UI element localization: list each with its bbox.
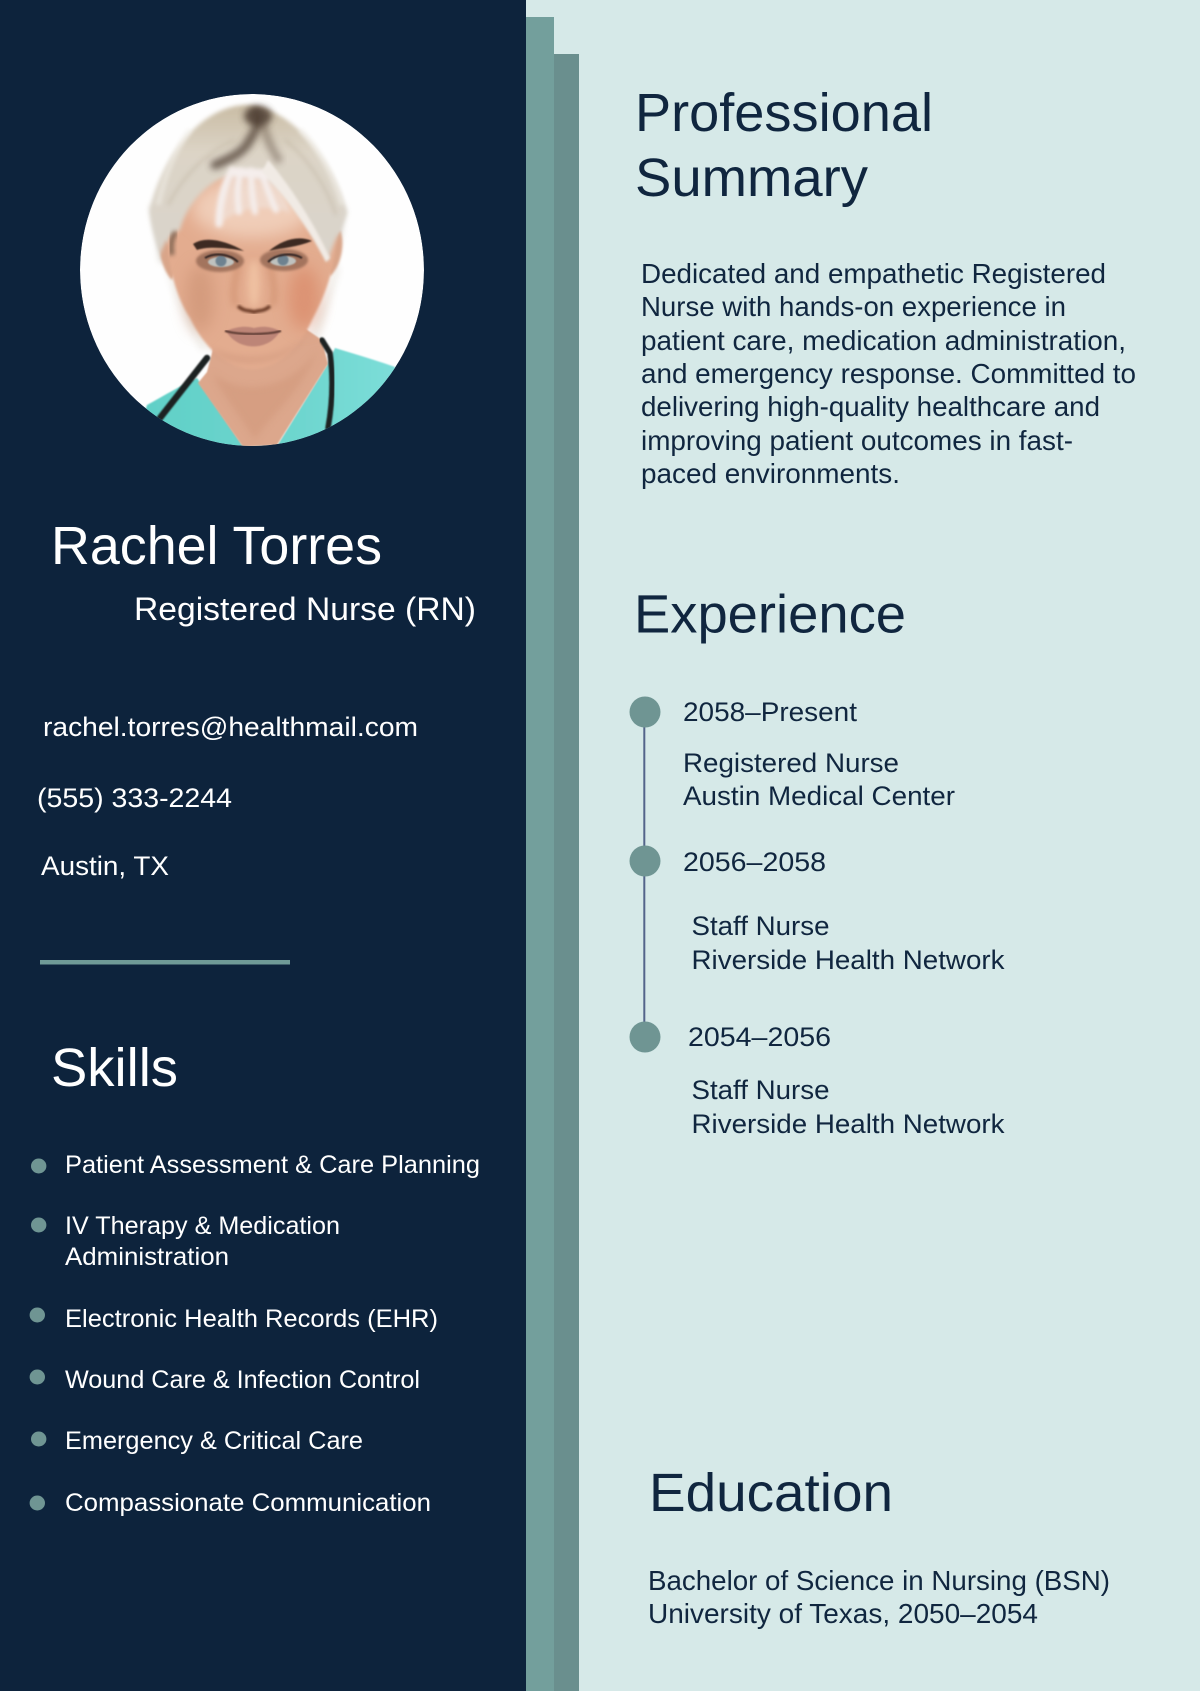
experience timeline [630,696,1005,1139]
job 1: Austin Medical Center [683,781,955,811]
job 2: Riverside Health Network [692,945,1005,975]
skill 3: Electronic Health Records (EHR) [65,1305,438,1333]
job 3 [688,1022,1005,1139]
summary paragraph: Nurse with hands-on experience in [641,291,1066,322]
heading: skills: Skills [51,1038,178,1098]
job 1: Registered Nurse [683,748,899,778]
education details: Bachelor of Science in Nursing (BSN) [648,1565,1110,1596]
portrait photo [80,94,424,460]
job 2: 2056–2058 [683,847,826,877]
timeline dot 1 [630,696,660,728]
skill 4: Wound Care & Infection Control [65,1366,420,1394]
summary paragraph: improving patient outcomes in fast- [641,425,1073,456]
timeline dot 2 [630,846,660,876]
summary paragraph: patient care, medication administration, [641,325,1126,356]
summary paragraph: Dedicated and empathetic Registered [641,258,1106,289]
job 3: Riverside Health Network [692,1109,1005,1139]
panel: sidebar [0,0,526,1691]
heading: education: Education [649,1463,893,1523]
skill 2: IV Therapy & Medication [65,1212,340,1240]
job 2 [683,847,1005,975]
contact details [37,712,418,881]
job 3: Staff Nurse [692,1075,830,1105]
summary paragraph: and emergency response. Committed to [641,358,1136,389]
accent band: dark teal [554,54,579,1691]
heading: professional summary [635,83,933,208]
skill 2: Administration [65,1243,229,1271]
job 1 [683,697,955,811]
skill 1: Patient Assessment & Care Planning [65,1151,480,1179]
skill 5: Emergency & Critical Care [65,1427,363,1455]
accent band: light teal [526,17,554,1691]
email: rachel.torres@healthmail.com [43,712,418,742]
summary paragraph: delivering high-quality healthcare and [641,391,1100,422]
location: Austin, TX [41,851,169,881]
job 1: 2058–Present [683,697,858,727]
summary paragraph: paced environments. [641,458,900,489]
skill 6: Compassionate Communication [65,1489,431,1517]
timeline line [643,712,645,1037]
education details: University of Texas, 2050–2054 [648,1598,1038,1629]
heading: experience: Experience [634,584,906,644]
skills list [30,1151,480,1517]
education details [648,1565,1110,1629]
job title: Registered Nurse (RN) [134,591,476,627]
skill 2 [31,1212,340,1271]
job 3: 2054–2056 [688,1022,831,1052]
heading: professional summary: Summary [635,148,868,208]
heading: professional summary: Professional [635,83,933,143]
job 2: Staff Nurse [692,911,830,941]
timeline dot 3 [630,1022,660,1052]
phone: (555) 333-2244 [37,783,232,813]
summary paragraph [641,258,1136,489]
name: Rachel Torres [51,516,382,576]
